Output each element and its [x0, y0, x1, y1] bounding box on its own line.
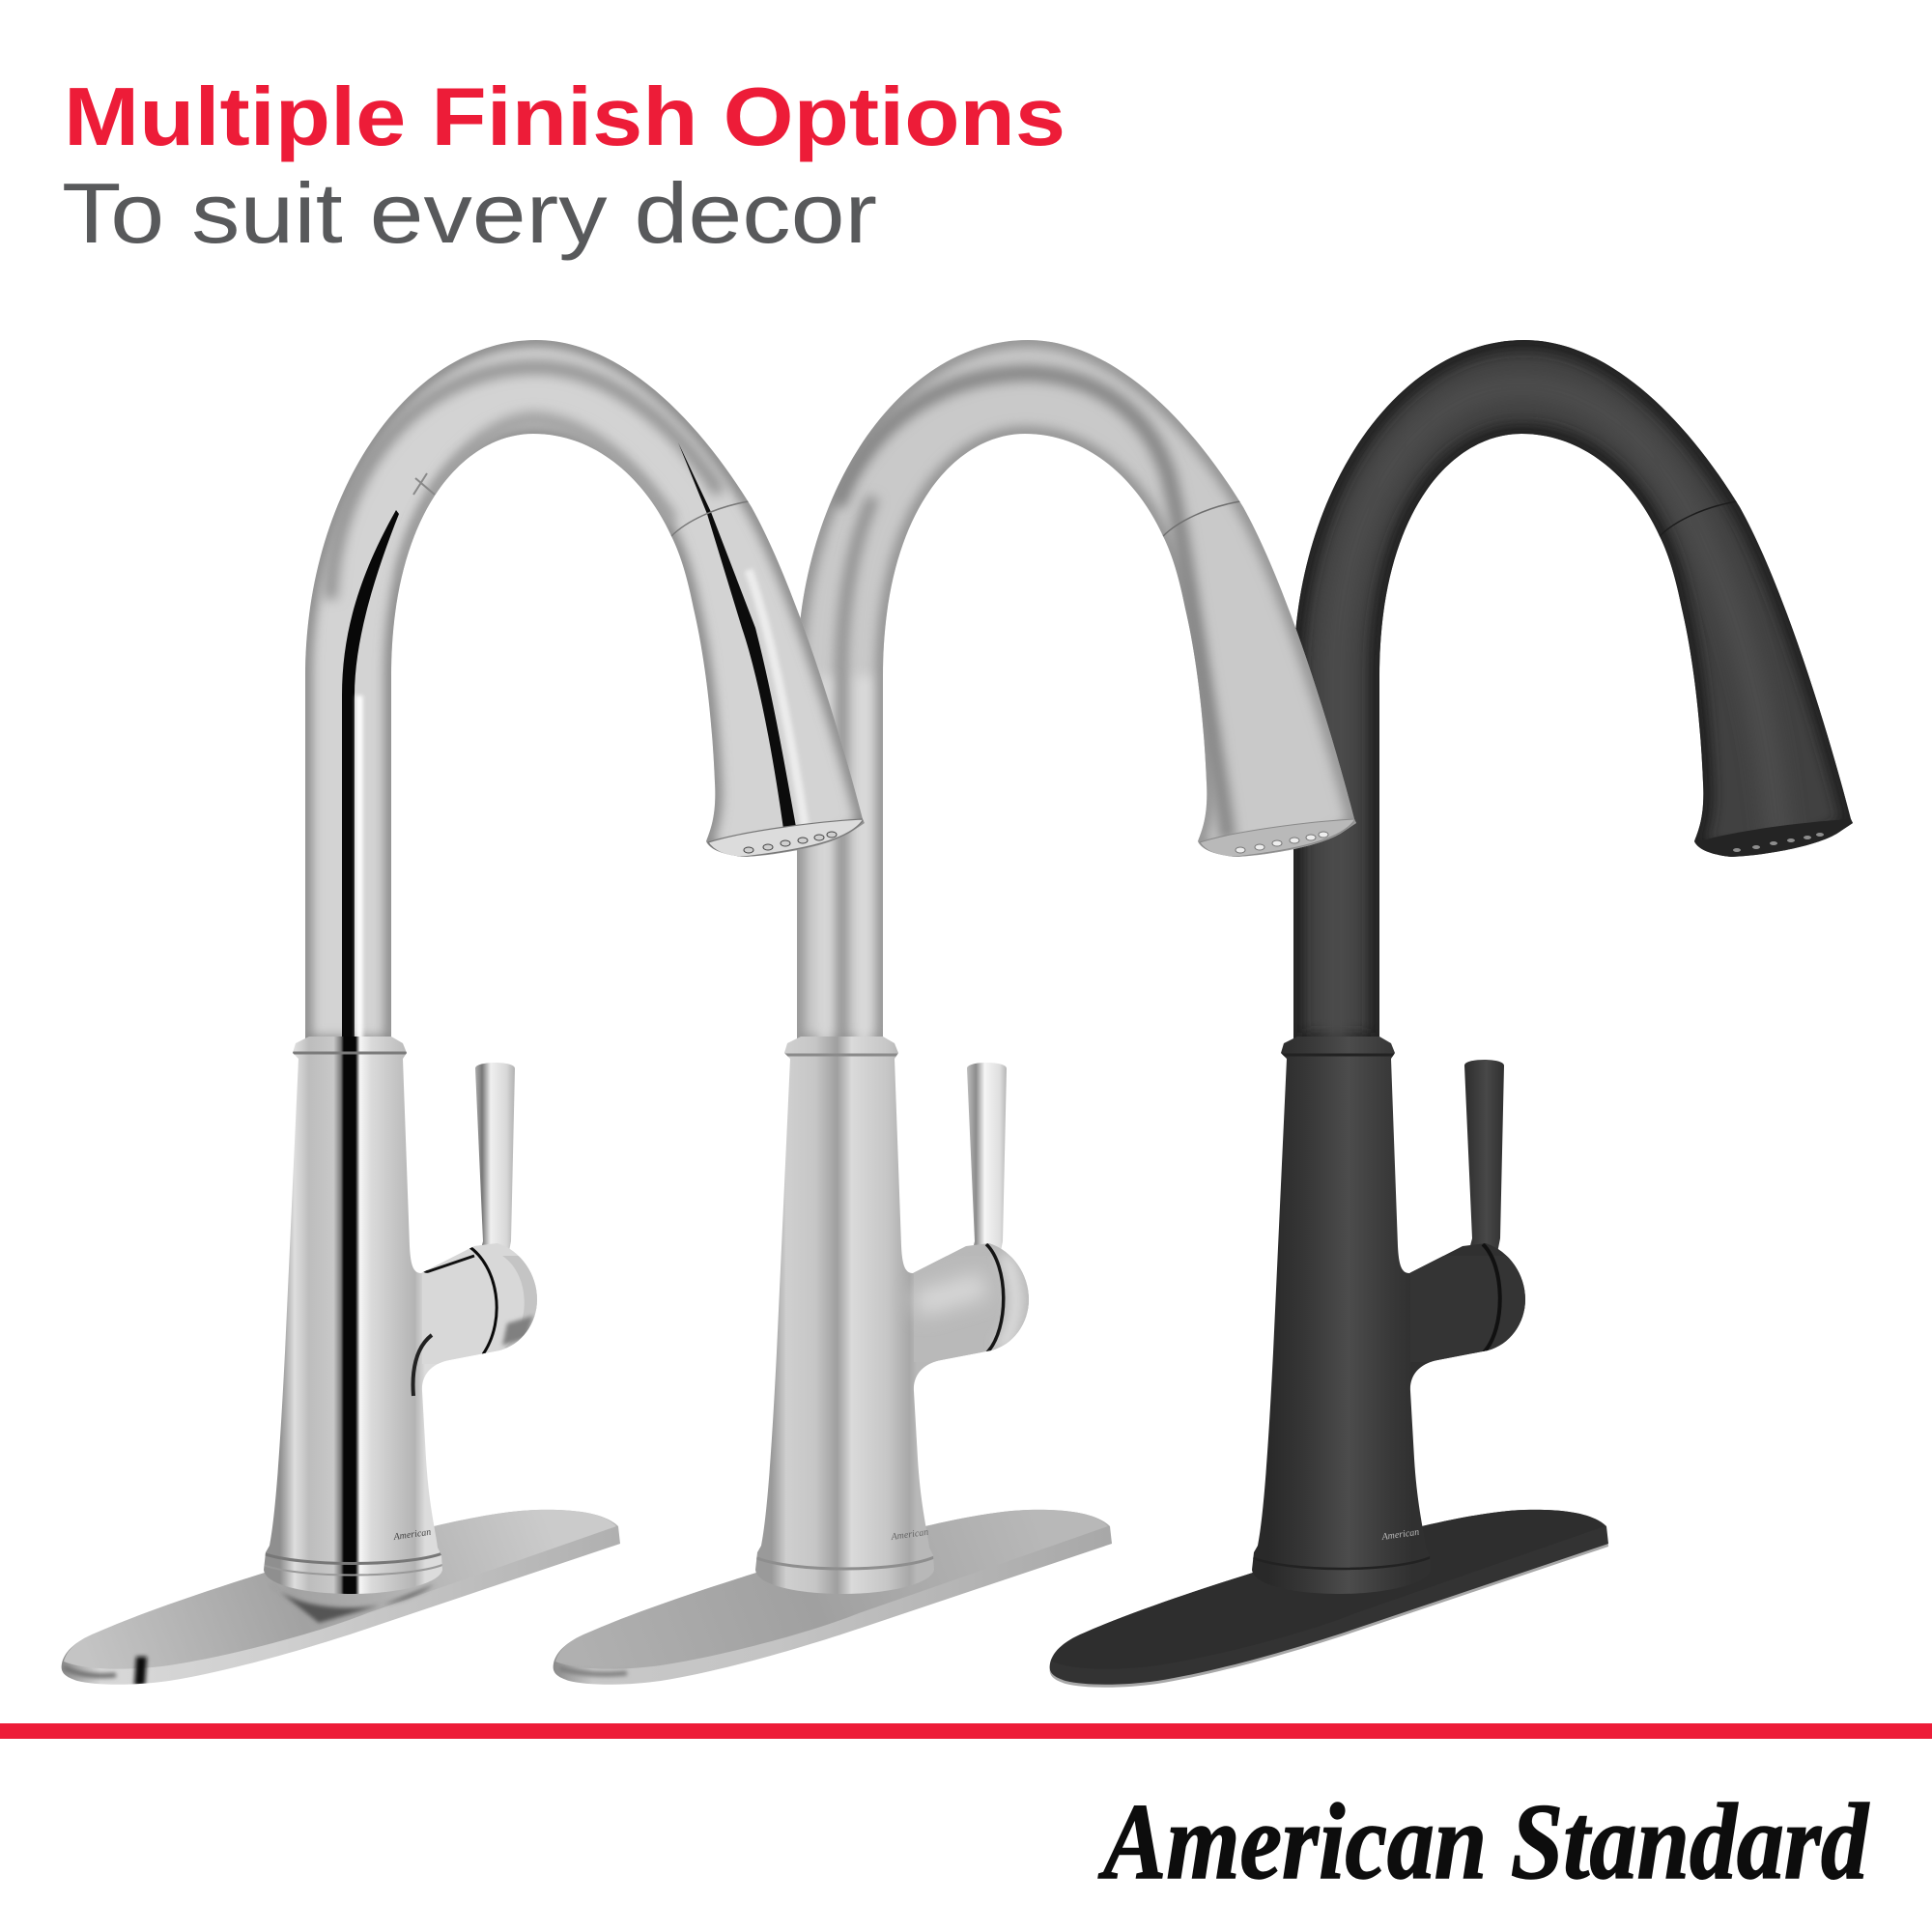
chrome body and hub: [263, 1037, 541, 1594]
black body and hub: [1251, 1037, 1529, 1594]
chrome lever handle: [475, 1063, 515, 1256]
small nickel logo mark: American: [890, 1527, 929, 1543]
faucet: matte black finish: [1050, 340, 1853, 1688]
black spout: [1293, 340, 1853, 1043]
faucet: polished chrome finish: [62, 340, 865, 1686]
nickel lever handle: [967, 1063, 1007, 1256]
nickel spout: [797, 340, 1356, 1048]
title: Multiple Finish Options: [64, 71, 1065, 163]
nickel body and hub: [754, 1037, 1033, 1594]
subtitle: To suit every decor: [62, 165, 877, 261]
black deck plate: [1050, 1510, 1608, 1688]
black lever handle: [1464, 1060, 1504, 1253]
small chrome logo mark: American: [392, 1527, 432, 1543]
nickel deck plate: [554, 1510, 1112, 1685]
faucet: brushed nickel finish: [554, 340, 1356, 1685]
chrome deck plate: [62, 1510, 620, 1686]
small black logo mark: American: [1380, 1527, 1420, 1543]
chrome spout: [305, 340, 865, 1048]
red divider rule: [0, 1723, 1932, 1739]
